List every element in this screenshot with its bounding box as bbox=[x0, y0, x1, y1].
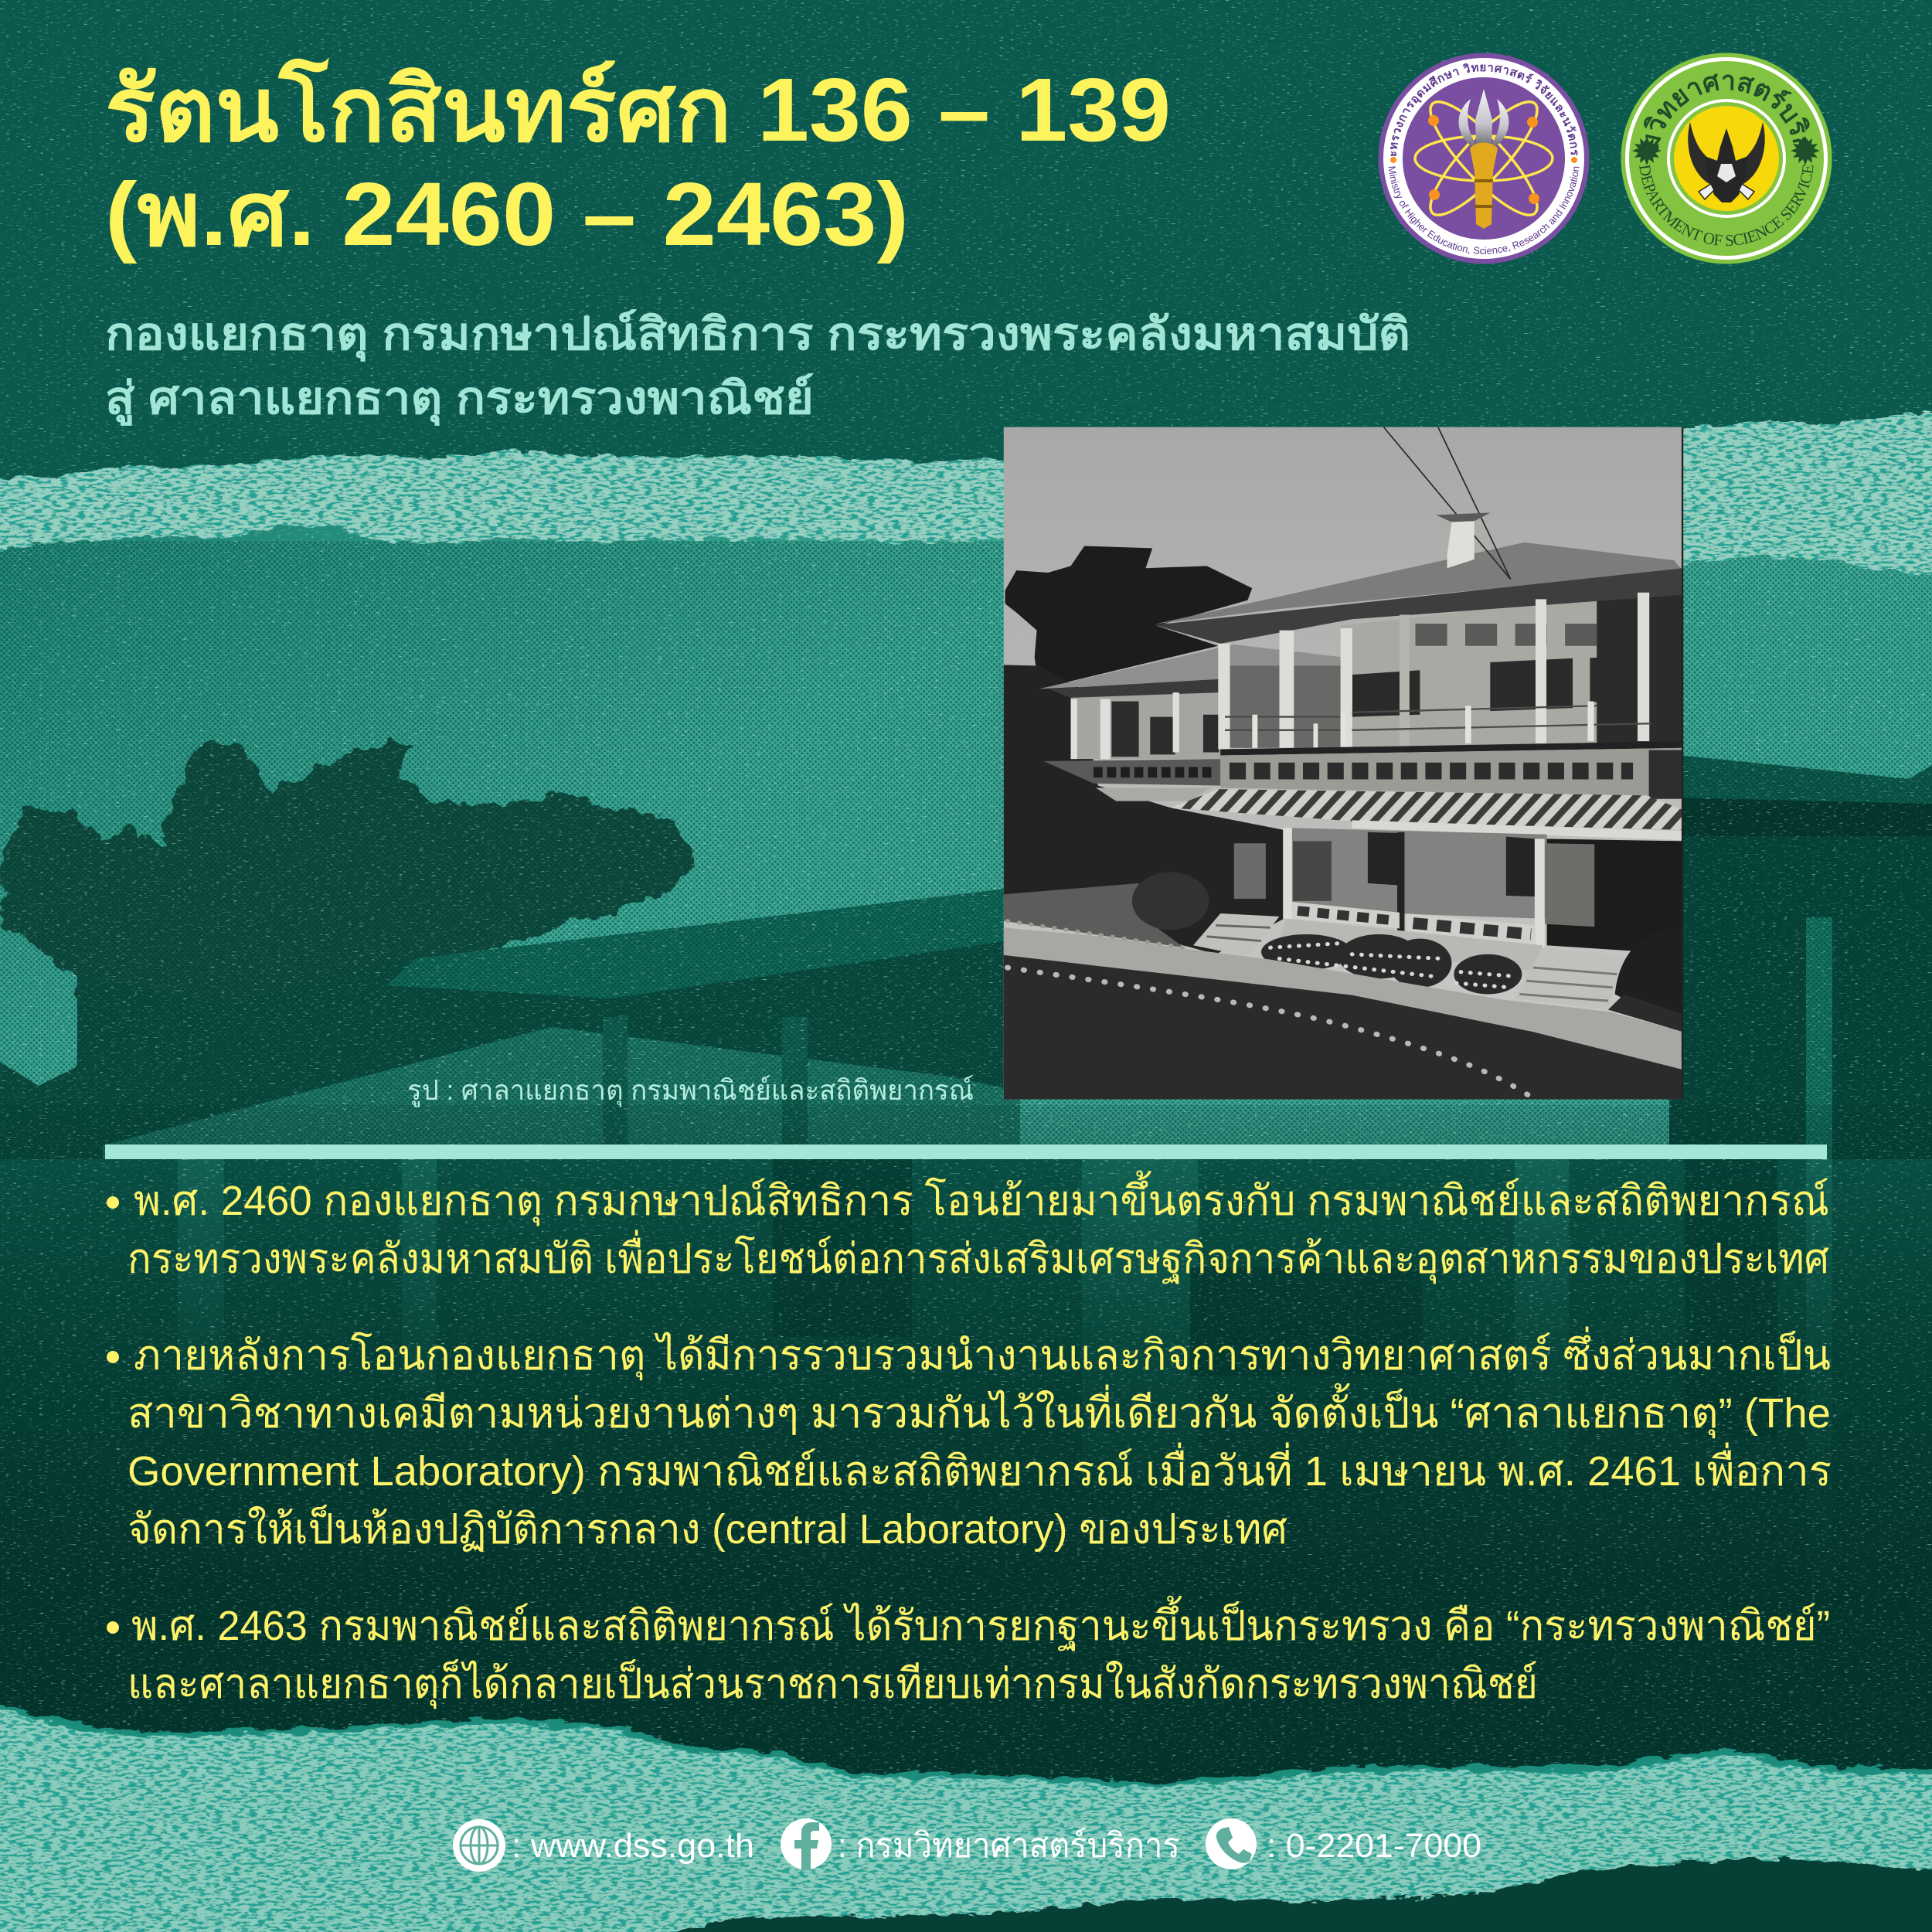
background: halftone texture bbox=[0, 541, 1932, 1159]
bullet paragraph 1: กระทรวงพระคลังมหาสมบัติ เพื่อประโยชน์ต่อการส่งเสริมเศรษฐกิจการค้าและอุตสาหกรรมของประเทศ bbox=[128, 1230, 1829, 1284]
photo: Government Laboratory building bbox=[1004, 427, 1683, 1100]
divider bar bbox=[105, 1145, 1827, 1159]
icon: garuda bbox=[1688, 122, 1765, 202]
background: top paper bbox=[0, 0, 1932, 502]
bullet paragraph 3: พ.ศ. 2463 กรมพาณิชย์และสถิติพยากรณ์ ได้รับการยกฐานะขึ้นเป็นกระทรวง คือ “กระทรวงพาณิชย์” bbox=[131, 1596, 1830, 1651]
torn paper strip: bottom edge shadow bbox=[0, 1700, 1932, 1855]
bullet paragraph 1 bbox=[107, 1171, 1829, 1284]
icon: star right bbox=[1791, 136, 1820, 165]
bullet paragraph 2: ภายหลังการโอนกองแยกธาตุ ได้มีการรวบรวมนำงานและกิจการทางวิทยาศาสตร์ ซึ่งส่วนมากเป็น bbox=[134, 1326, 1831, 1381]
bottom right dark paper bbox=[0, 1839, 1932, 1932]
bullet paragraph 2: สาขาวิชาทางเคมีตามหน่วยงานต่างๆ มารวมกันไว้ในที่เดียวกัน จัดตั้งเป็น “ศาลาแยกธาตุ” (The bbox=[128, 1383, 1831, 1439]
title bbox=[105, 58, 1171, 264]
bullet paragraph 2: จัดการให้เป็นห้องปฏิบัติการกลาง (central Laboratory) ของประเทศ bbox=[128, 1505, 1287, 1553]
background: tree and building silhouette bbox=[0, 739, 1932, 1175]
bullet paragraph 2 bbox=[107, 1326, 1832, 1553]
torn paper strip: top bbox=[0, 410, 1932, 576]
facebook page: : กรมวิทยาศาสตร์บริการ bbox=[838, 1827, 1180, 1865]
footer contacts bbox=[453, 1818, 1481, 1872]
icon: facebook bbox=[781, 1818, 832, 1869]
subtitle bbox=[105, 308, 1410, 427]
torn paper strip: bottom bbox=[0, 1706, 1932, 1932]
title: (พ.ศ. 2460 – 2463) bbox=[105, 164, 909, 264]
subtitle: กองแยกธาตุ กรมกษาปณ์สิทธิการ กระทรวงพระคลังมหาสมบัติ bbox=[105, 308, 1410, 362]
subtitle: สู่ ศาลาแยกธาตุ กระทรวงพาณิชย์ bbox=[105, 372, 814, 427]
title: รัตนโกสินทร์ศก 136 – 139 bbox=[105, 58, 1171, 160]
bullet paragraph 2: Government Laboratory) กรมพาณิชย์และสถิติพยากรณ์ เมื่อวันที่ 1 เมษายน พ.ศ. 2461 เพื่อการ bbox=[128, 1442, 1832, 1495]
photo sub-element: flower beds bbox=[1261, 934, 1522, 994]
logo: Ministry of Higher Education, Science, Research and Innovation: Ministry of Higher Education, Science, Research and Innovation bbox=[1388, 166, 1580, 254]
logo: Department of Science Service: DEPARTMENT OF SCIENCE SERVICE bbox=[1639, 164, 1814, 246]
bullet paragraph 3: และศาลาแยกธาตุก็ได้กลายเป็นส่วนราชการเทียบเท่ากรมในสังกัดกระทรวงพาณิชย์ bbox=[128, 1659, 1538, 1709]
bullet paragraph 1: พ.ศ. 2460 กองแยกธาตุ กรมกษาปณ์สิทธิการ โอนย้ายมาขึ้นตรงกับ กรมพาณิชย์และสถิติพยากรณ์ bbox=[134, 1171, 1829, 1226]
bullet paragraph 3 bbox=[107, 1596, 1830, 1709]
telephone number: : 0-2201-7000 bbox=[1267, 1827, 1481, 1865]
website: : www.dss.go.th bbox=[512, 1827, 754, 1865]
logo: Ministry of Higher Education, Science, Research and Innovation bbox=[1379, 53, 1589, 264]
icon: phone bbox=[1206, 1818, 1257, 1869]
photo caption: รูป : ศาลาแยกธาตุ กรมพาณิชย์และสถิติพยากรณ์ bbox=[407, 1074, 974, 1107]
icon: globe bbox=[453, 1819, 505, 1872]
icon: star left bbox=[1632, 136, 1662, 165]
logo: Department of Science Service bbox=[1621, 53, 1832, 264]
background: lower dark field bbox=[0, 1105, 1932, 1932]
